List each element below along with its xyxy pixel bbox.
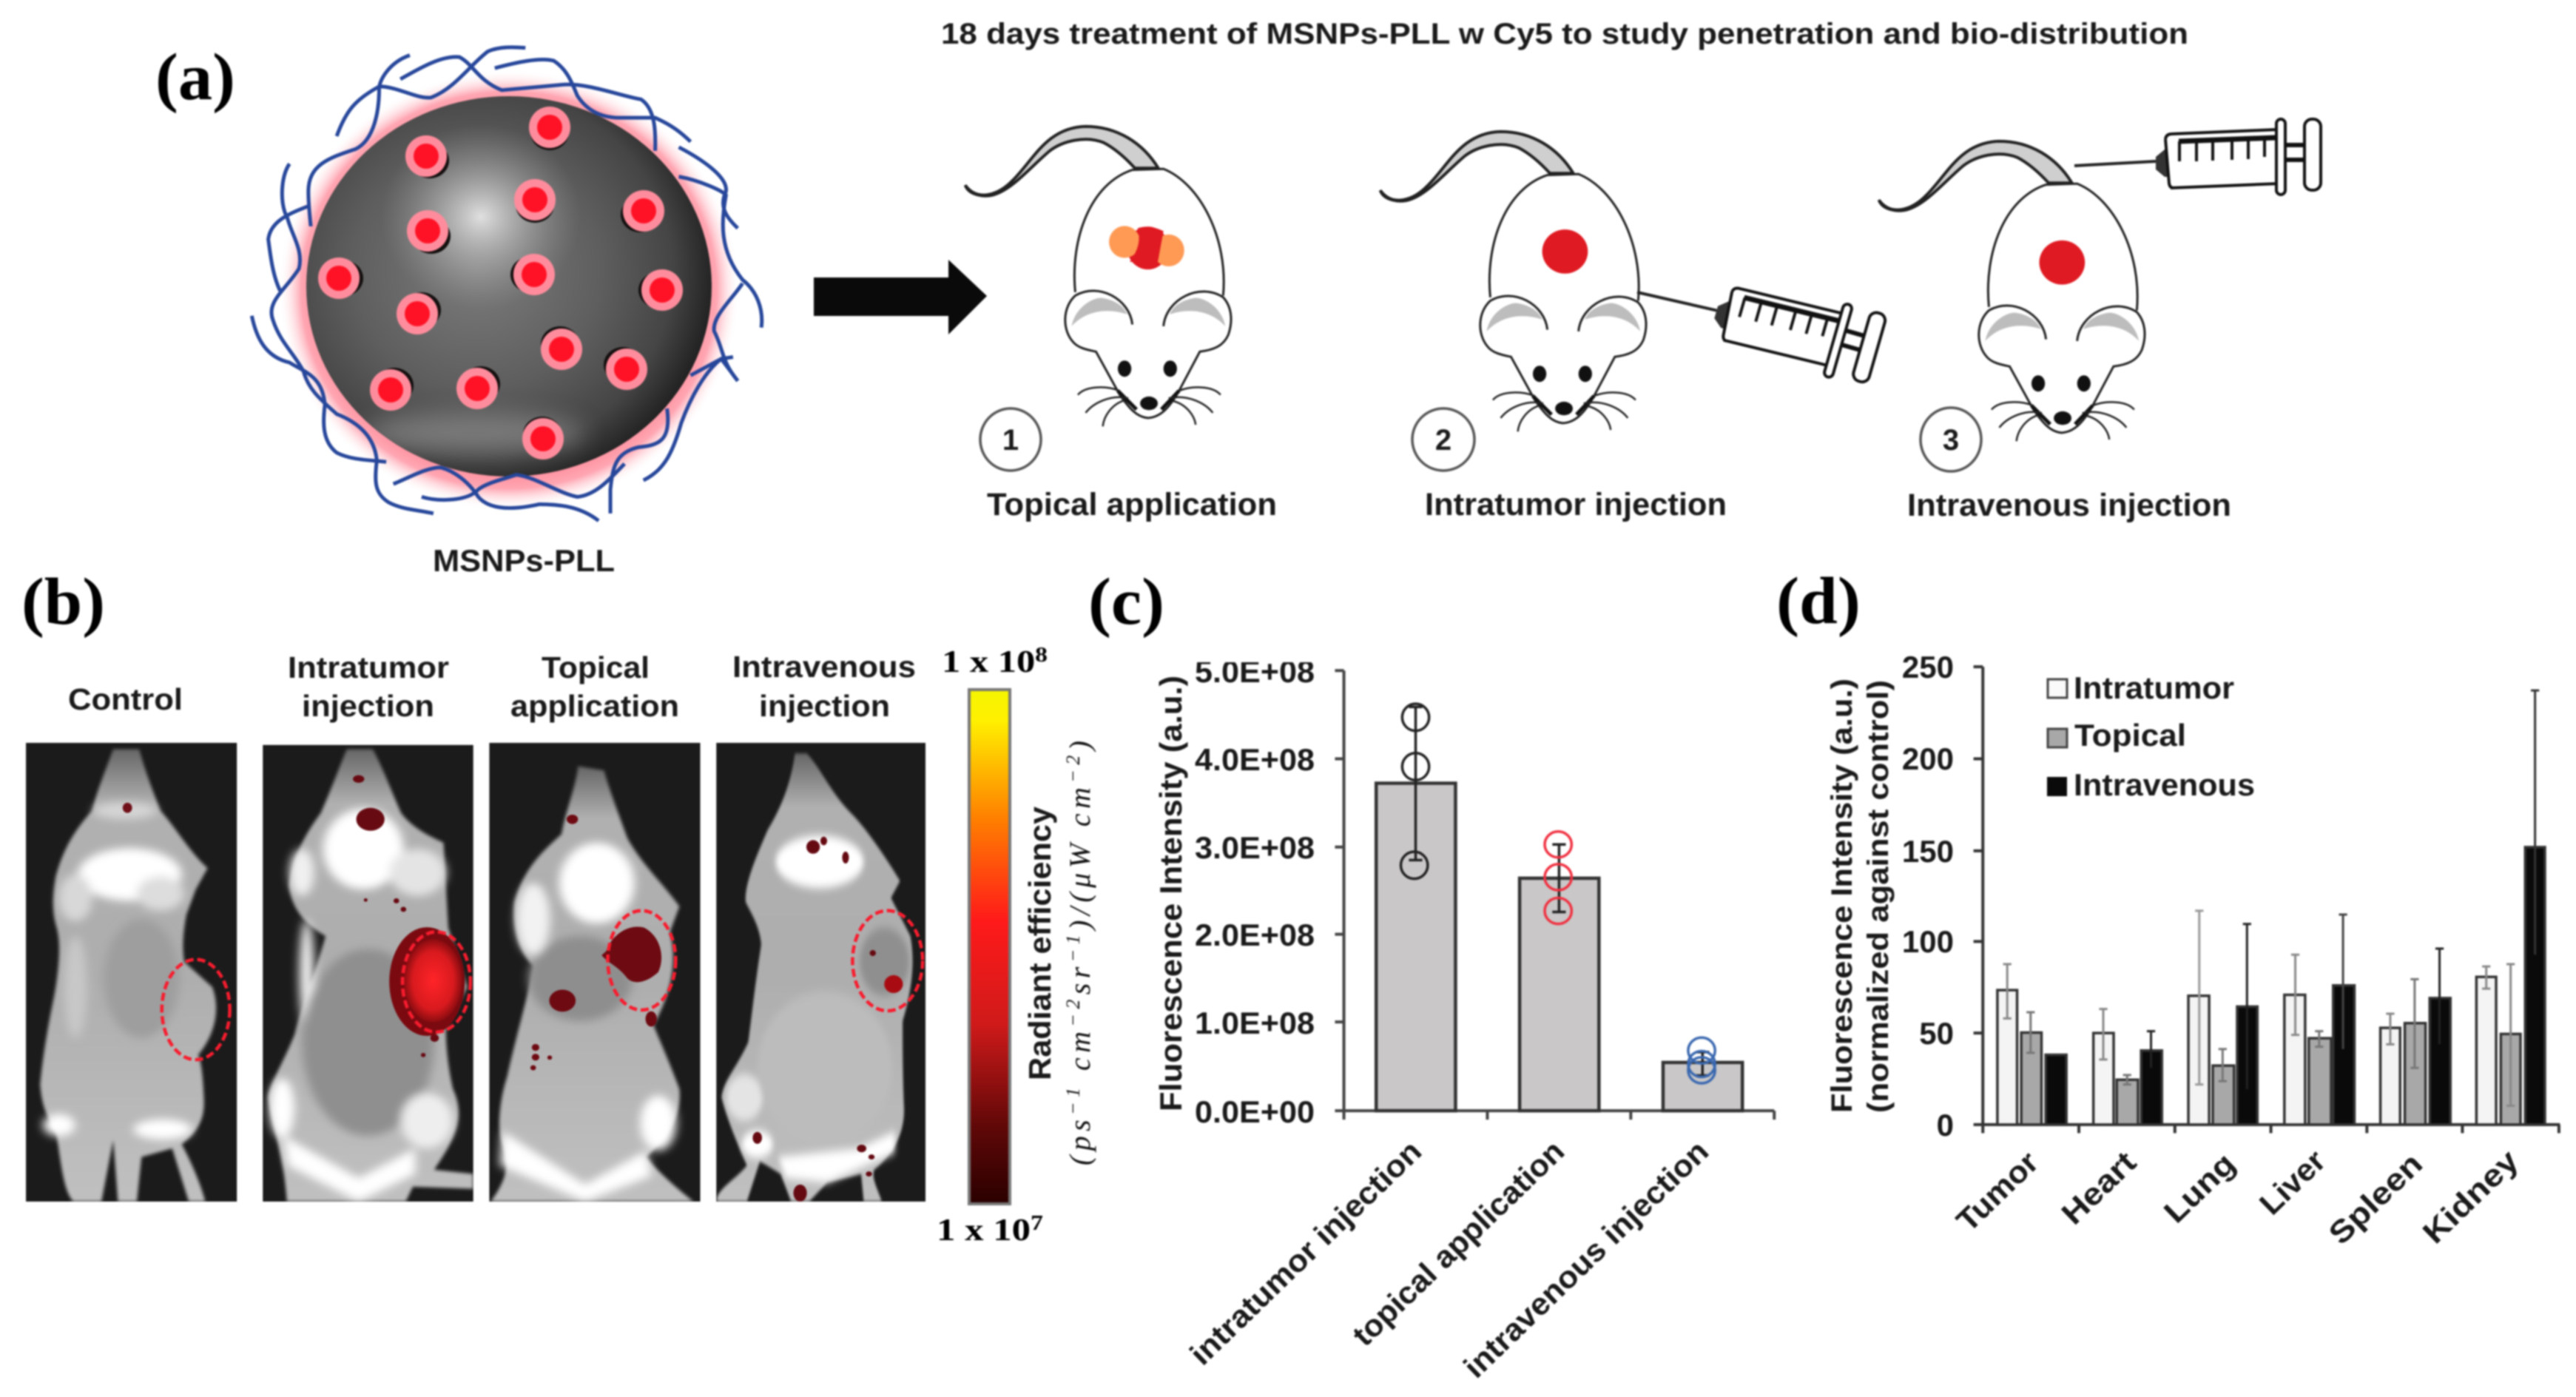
tumour <box>2039 240 2085 285</box>
colour scale maximum: 1 x 10 <box>942 645 1019 679</box>
step number 2: 2 <box>1435 424 1451 457</box>
bars, error bars and data points <box>1335 670 1774 1120</box>
panel d label: (d) <box>1776 565 1861 638</box>
group: lung <box>2188 911 2257 1125</box>
y tick labels: 50 <box>1919 1016 1954 1051</box>
step number 2 <box>1412 408 1474 471</box>
colour scale units: −1 <box>1062 1088 1084 1115</box>
y tick labels: 150 <box>1902 834 1954 869</box>
tumour <box>1542 229 1588 274</box>
label: topical application: Topical application <box>987 487 1277 522</box>
illustration: MSNPs-PLL nanoparticle <box>252 47 762 521</box>
x category labels <box>1183 1134 1715 1384</box>
tumour outline <box>162 960 230 1060</box>
x category labels: Heart <box>2054 1145 2142 1231</box>
panel b label: (b) <box>21 565 105 639</box>
signal spots <box>752 837 903 1202</box>
colour scale units: cm <box>1063 1031 1096 1083</box>
y axis title: Fluorescence Intensity (a.u.) <box>1826 679 1858 1113</box>
title: intratumor injection <box>288 650 449 723</box>
group: spleen <box>2381 949 2450 1125</box>
arrow <box>814 260 987 334</box>
step number 3 <box>1921 408 1981 471</box>
title: topical application: application <box>510 689 679 723</box>
y tick labels: 200 <box>1902 741 1954 776</box>
fluorescence photo: control mouse <box>26 743 237 1202</box>
colour scale units: )/(μW cm <box>1063 787 1096 932</box>
panel a label: (a) <box>155 41 235 114</box>
mouse 1: topical application <box>965 127 1231 426</box>
fluorescence photo: intratumor mouse <box>263 745 473 1202</box>
colour scale units: −1 <box>1062 935 1084 962</box>
step number 1: 1 <box>1002 424 1019 457</box>
y tick labels: 250 <box>1902 650 1954 684</box>
bar: topical <box>1520 878 1599 1111</box>
signal spots <box>530 815 661 1071</box>
treated tumour with topical patches <box>1109 226 1184 269</box>
syringe: intratumor <box>1629 247 1887 388</box>
colour scale maximum: 8 <box>1035 644 1048 667</box>
title: intravenous injection: Intravenous <box>732 650 916 684</box>
title: control: Control <box>68 682 183 716</box>
tumour outline <box>607 911 675 1010</box>
y tick labels: 1.0E+08 <box>1195 1006 1315 1040</box>
bars and error bars <box>1974 667 2560 1133</box>
mouse 2: intratumor injection <box>1380 132 1646 431</box>
title: topical application: Topical <box>542 650 650 684</box>
y tick labels <box>1902 650 1954 1142</box>
colour scale bar <box>969 690 1010 1204</box>
x category labels: Lung <box>2157 1146 2242 1230</box>
group: kidney <box>2476 690 2545 1125</box>
fluorescence photo: intravenous mouse <box>716 743 925 1202</box>
y tick labels: 4.0E+08 <box>1195 742 1315 777</box>
colour scale units: ) <box>1063 741 1096 752</box>
group: tumor <box>1997 964 2066 1125</box>
colour scale title: Radiant efficiency <box>1022 806 1057 1080</box>
bar chart d: biodistribution by organ <box>1826 650 2560 1251</box>
title: intratumor injection: injection <box>302 689 434 723</box>
x category labels <box>1949 1142 2526 1251</box>
y tick labels: 0.0E+00 <box>1195 1094 1315 1129</box>
sphere shading <box>363 124 584 452</box>
y tick labels: 5.0E+08 <box>1195 654 1315 689</box>
y axis title: Fluorescence Intensity (a.u.) <box>1153 676 1188 1111</box>
legend <box>2047 670 2255 802</box>
tumour signal <box>389 927 465 1036</box>
mouse 3: intravenous injection <box>1879 141 2145 441</box>
head signal spots <box>353 775 439 1057</box>
pink halo <box>278 70 740 511</box>
y tick labels <box>1191 654 1318 1129</box>
label: intratumor injection: Intratumor injection <box>1425 487 1727 522</box>
y tick labels: 3.0E+08 <box>1195 830 1315 865</box>
title: topical application <box>510 650 679 723</box>
bar: intravenous <box>1663 1063 1742 1111</box>
legend: Intratumor <box>2074 670 2234 705</box>
x category labels: intravenous injection <box>1457 1134 1715 1384</box>
x category labels: Liver <box>2253 1143 2332 1222</box>
tumour outline <box>852 911 923 1011</box>
panel c label: (c) <box>1088 565 1164 639</box>
x category labels: Spleen <box>2322 1146 2429 1251</box>
y tick labels: 0 <box>1937 1108 1954 1142</box>
y tick labels: 100 <box>1902 924 1954 959</box>
PLL polymer strands <box>252 47 762 521</box>
colour scale units: −2 <box>1062 1000 1084 1027</box>
tumour outline <box>402 932 471 1032</box>
legend: Intravenous <box>2074 767 2255 802</box>
colour scale minimum: 1 x 10 <box>937 1213 1014 1248</box>
bar chart c: fluorescence by route <box>1153 654 1774 1384</box>
step number 3: 3 <box>1943 424 1959 457</box>
group: heart <box>2094 1009 2162 1125</box>
y tick labels: 2.0E+08 <box>1195 918 1315 952</box>
legend: Topical <box>2074 718 2186 753</box>
signal spot <box>123 803 132 813</box>
title: intravenous injection <box>732 650 916 723</box>
title: intravenous injection: injection <box>759 689 890 723</box>
nanoparticle label: MSNPs-PLL <box>433 543 615 578</box>
treatment title: 18 days treatment of MSNPs-PLL w Cy5 to study penetration and bio-distribution <box>941 18 2188 50</box>
x category labels: topical application <box>1346 1134 1571 1353</box>
x category labels: Tumor <box>1949 1145 2045 1239</box>
colour scale units: −2 <box>1062 755 1084 783</box>
title: intratumor injection: Intratumor <box>288 650 449 684</box>
data points: intravenous <box>1688 1037 1715 1083</box>
grey mesoporous sphere <box>306 96 712 477</box>
data points: topical <box>1545 832 1571 924</box>
data points: intratumor <box>1401 704 1429 879</box>
y axis title <box>1826 679 1895 1113</box>
x category labels: Kidney <box>2416 1142 2526 1250</box>
y axis title: (normalized against control) <box>1862 680 1895 1113</box>
colour scale units: (ps <box>1063 1120 1096 1165</box>
label: intravenous injection: Intravenous injection <box>1907 488 2231 523</box>
colour scale units: sr <box>1063 966 1096 994</box>
group: liver <box>2285 915 2355 1125</box>
pores loaded with dye <box>318 107 683 460</box>
column titles <box>68 650 916 723</box>
colour scale minimum: 7 <box>1031 1212 1043 1235</box>
step number 1 <box>980 408 1041 471</box>
x category labels: intratumor injection <box>1183 1134 1428 1372</box>
fluorescence photo: topical mouse <box>489 743 700 1202</box>
bar: intratumor <box>1376 783 1455 1111</box>
syringe: intravenous <box>2074 119 2321 195</box>
